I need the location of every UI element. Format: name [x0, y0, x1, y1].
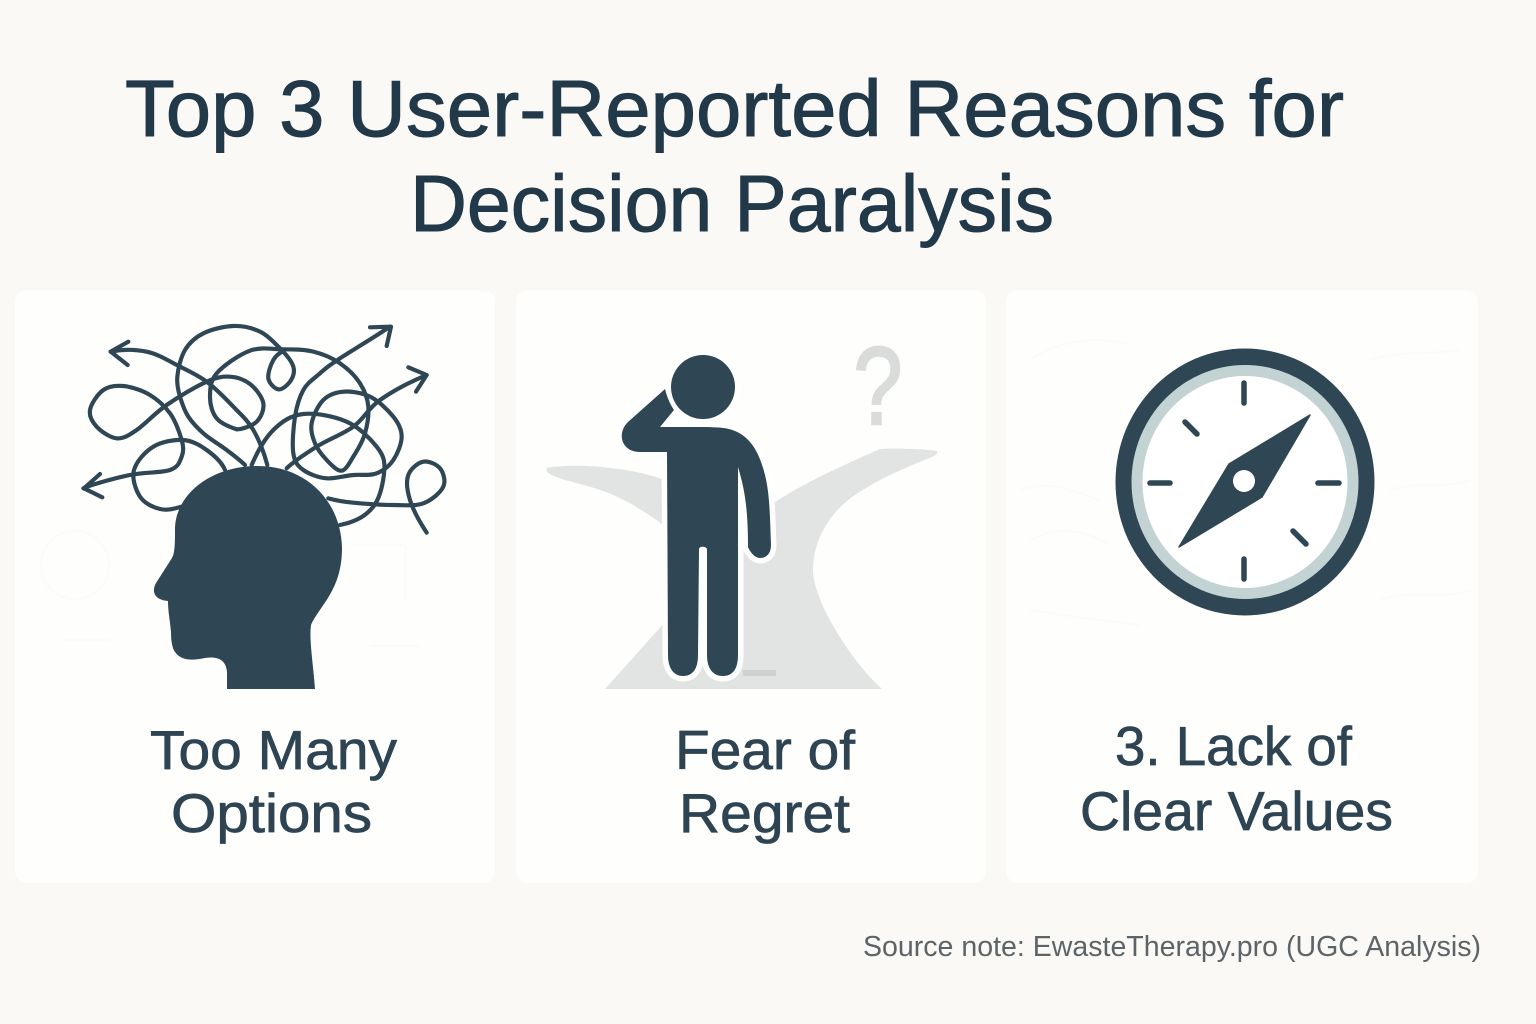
label: lack of clear values: [1080, 715, 1393, 842]
title: Top 3 User-Reported Reasons for: [125, 64, 1344, 153]
label: too many options: Options: [171, 782, 372, 844]
source note: Source note: EwasteTherapy.pro (UGC Analysis): [863, 931, 1481, 963]
icon: head with tangled arrows: [83, 326, 444, 689]
label: lack of clear values: 3. Lack of: [1115, 715, 1353, 777]
label: fear of regret: [675, 719, 856, 844]
icon: compass: [1116, 348, 1374, 616]
title: [125, 64, 1344, 248]
label: lack of clear values: Clear Values: [1080, 780, 1393, 842]
panel: fear of regret: [516, 290, 986, 883]
label: too many options: Too Many: [150, 719, 398, 781]
panel: too many options: [15, 290, 495, 883]
icon: person at a forked road: [546, 326, 937, 689]
label: fear of regret: Regret: [679, 782, 850, 844]
label: fear of regret: Fear of: [675, 719, 856, 781]
icon: question mark: ?: [854, 326, 902, 448]
icon: thinking person: [622, 351, 771, 676]
title: Decision Paralysis: [410, 159, 1054, 248]
label: too many options: [150, 719, 398, 844]
panel: lack of clear values: [1006, 290, 1478, 883]
